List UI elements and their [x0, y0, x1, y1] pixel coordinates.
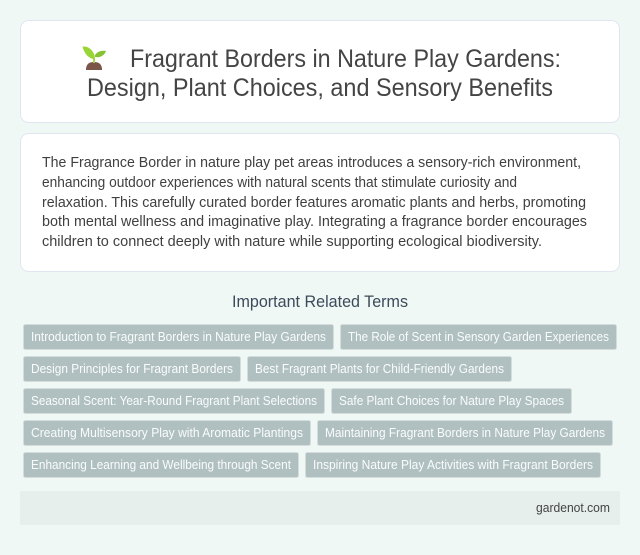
description text [42, 155, 587, 250]
tag [24, 388, 324, 414]
tag [332, 388, 572, 414]
heading: important related terms: Important Related Terms [232, 293, 408, 311]
tag [24, 324, 334, 350]
tag [24, 420, 310, 446]
tag: Seasonal Scent: Year-Round Fragrant Plant Selections [31, 394, 317, 408]
tag [306, 452, 600, 478]
description text: children to connect deeply with nature while supporting ecological biodiversity. [42, 234, 542, 250]
tag: Introduction to Fragrant Borders in Nature Play Gardens [31, 330, 326, 344]
tag [24, 356, 240, 382]
description text: enhancing outdoor experiences with natural scents that stimulate curiosity and [42, 175, 517, 191]
description text: The Fragrance Border in nature play pet areas introduces a sensory-rich environment, [42, 155, 581, 171]
tag [318, 420, 612, 446]
tag: Maintaining Fragrant Borders in Nature Play Gardens [325, 426, 605, 440]
title text [87, 45, 561, 102]
tag [340, 324, 616, 350]
panel: title [20, 20, 620, 122]
footer [20, 491, 620, 525]
tag: The Role of Scent in Sensory Garden Experiences [348, 330, 609, 344]
tag [248, 356, 512, 382]
tag: Best Fragrant Plants for Child-Friendly Gardens [255, 362, 504, 376]
icon: seedling [82, 46, 106, 70]
tags [24, 324, 616, 478]
tag [24, 452, 298, 478]
title text: Design, Plant Choices, and Sensory Benefits [87, 74, 553, 102]
description text: relaxation. This carefully curated border features aromatic plants and herbs, promoting [42, 195, 586, 211]
tag: Enhancing Learning and Wellbeing through Scent [31, 458, 291, 472]
panel: description [20, 134, 620, 272]
description text: both mental wellness and imaginative play. Integrating a fragrance border encourages [42, 214, 587, 230]
tag: Inspiring Nature Play Activities with Fragrant Borders [313, 458, 593, 472]
footer: gardenot.com [536, 501, 610, 515]
title text: Fragrant Borders in Nature Play Gardens: [130, 45, 561, 73]
tag: Safe Plant Choices for Nature Play Spaces [339, 394, 564, 408]
tag: Creating Multisensory Play with Aromatic Plantings [31, 426, 303, 440]
tag: Design Principles for Fragrant Borders [31, 362, 233, 376]
